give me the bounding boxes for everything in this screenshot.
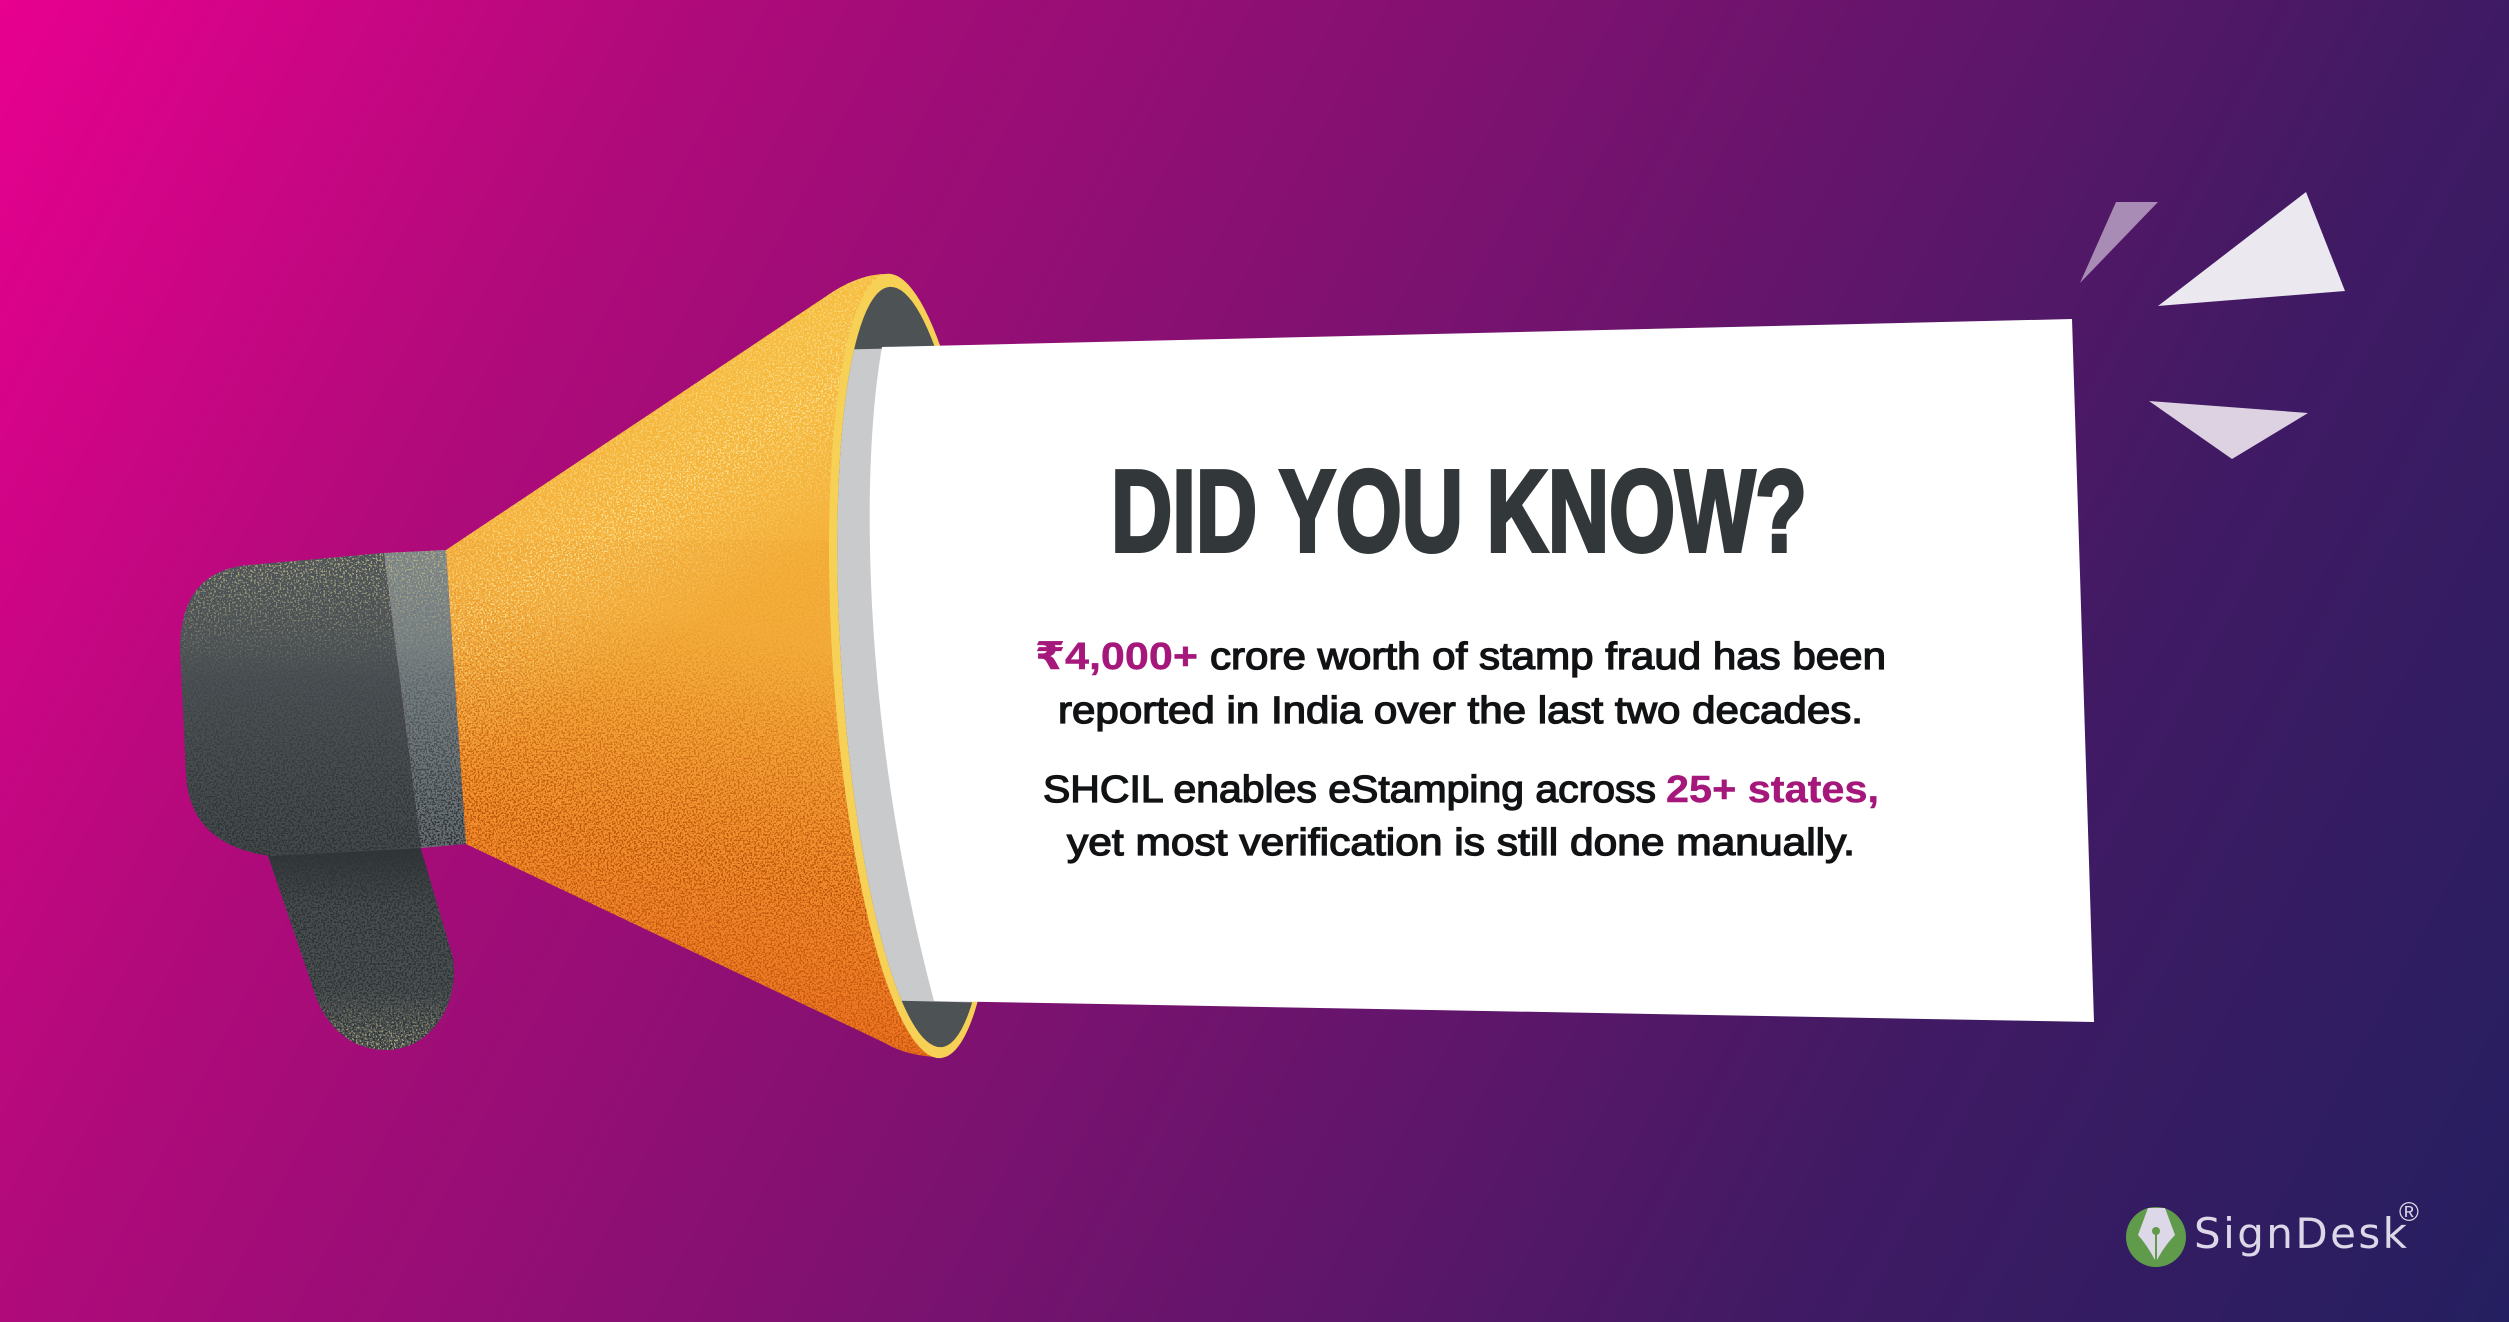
megaphone collar [384,550,466,848]
line three: SHCIL enables eStamping across [1043,769,1656,811]
paragraph: SHCIL eStamping [1043,769,1879,864]
megaphone dark interior [816,282,1015,1052]
megaphone grey inner wall [837,348,972,1002]
line four: yet most verification is still done manually. [1067,822,1855,864]
megaphone body [180,550,466,856]
states highlight: 25+ states, [1666,769,1879,811]
amount highlight: ₹4,000+ [1035,636,1198,678]
line one: crore worth of stamp fraud has been [1210,636,1886,678]
megaphone cone [446,274,933,1057]
SignDesk logo [2126,1197,2419,1267]
registered mark: ® [2399,1197,2419,1227]
white message panel [870,319,2094,1022]
megaphone handle [268,848,454,1050]
logo icon: pen nib [2126,1207,2186,1267]
line two: reported in India over the last two decades. [1058,690,1863,732]
paragraph: stamp fraud [1035,636,1886,732]
megaphone illustration [170,260,1021,1080]
decorative sound shard: large [2158,192,2345,306]
decorative sound shard: lower [2149,401,2308,459]
heading: DID YOU KNOW? [1111,446,1807,576]
megaphone yellow rim [807,268,1021,1064]
logo wordmark: SignDesk [2194,1209,2408,1258]
decorative sound shard: faded [2080,202,2158,283]
